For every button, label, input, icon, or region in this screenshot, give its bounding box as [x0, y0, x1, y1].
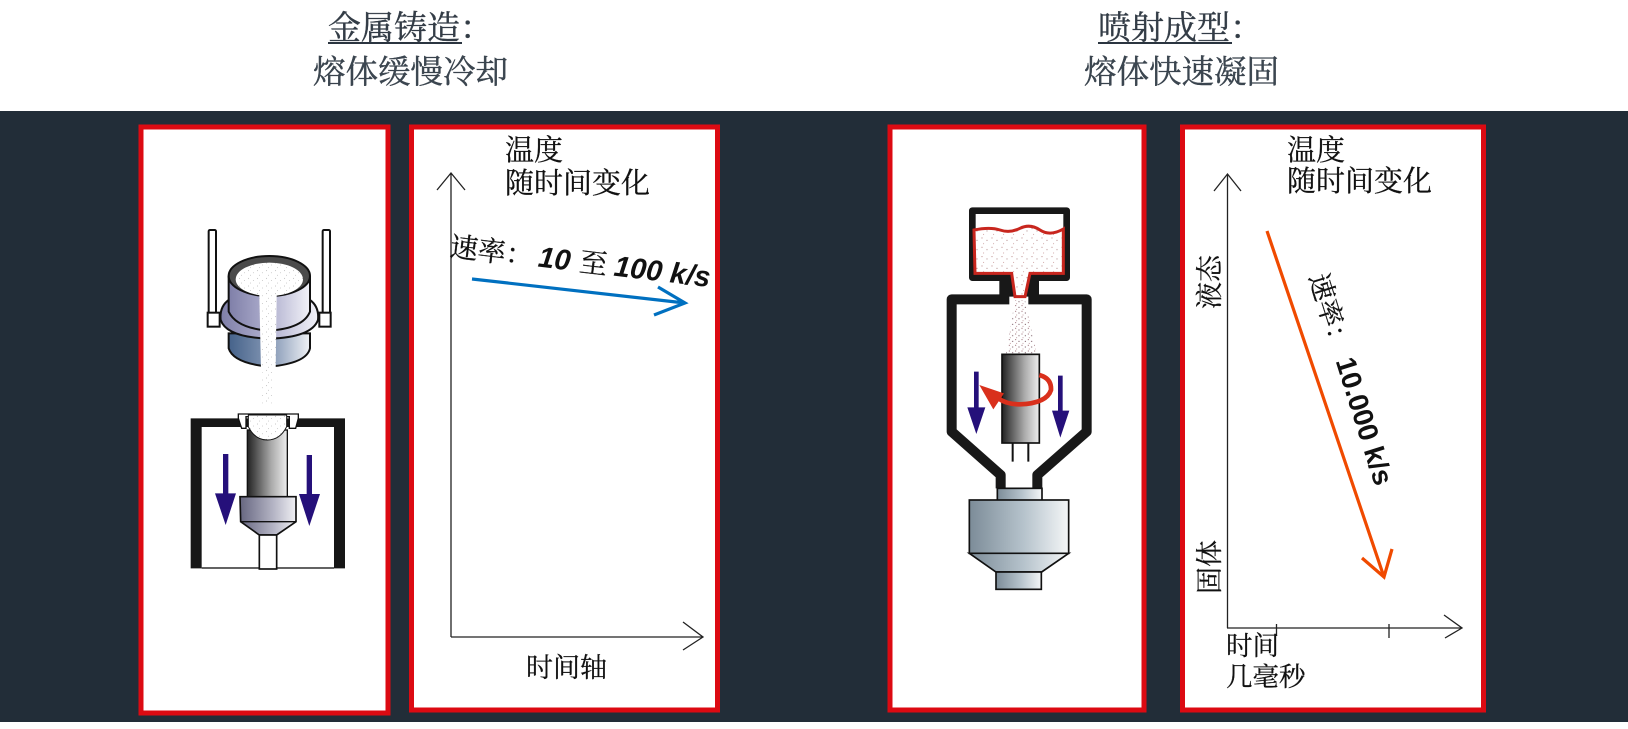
panel: spray forming chart — [1182, 127, 1484, 710]
axes — [1214, 174, 1462, 638]
chart title: 随时间变化 — [505, 167, 650, 200]
icon: melt crucible — [972, 211, 1067, 297]
axes — [437, 173, 703, 650]
icon: casting mould — [191, 414, 345, 569]
heading: metal casting: 熔体缓慢冷却 — [313, 54, 508, 91]
heading: spray forming: 喷射成型： — [1098, 10, 1263, 47]
icon: spray chamber — [952, 299, 1087, 488]
chart title: 温度 — [1287, 134, 1345, 167]
heading: metal casting: 金属铸造： — [328, 10, 493, 47]
blue rate arrow — [472, 279, 685, 315]
heading: spray forming: 熔体快速凝固 — [1084, 54, 1279, 91]
label: solid: 固体 — [1195, 540, 1225, 594]
label: liquid: 液态 — [1195, 254, 1225, 309]
time axis label: 时间轴 — [526, 653, 607, 683]
chart title: 温度 — [505, 134, 563, 167]
rate label: 速率：10至100 k/s — [448, 231, 712, 294]
rate label: 速率：10.000 k/s — [1303, 269, 1399, 489]
icon: downward arrows — [215, 454, 320, 526]
icon: atomiser base — [969, 488, 1069, 589]
heading: metal casting — [313, 10, 508, 91]
panel: casting illustration — [141, 127, 388, 713]
red rate arrow — [1267, 231, 1392, 577]
panel: spray forming illustration — [890, 127, 1144, 710]
chart title: 随时间变化 — [1287, 165, 1432, 198]
time label: 几毫秒 — [1226, 662, 1307, 692]
icon: rotating arrow — [979, 375, 1051, 409]
icon: ladle — [208, 230, 331, 403]
time label: 时间 — [1226, 631, 1279, 661]
heading: spray forming — [1084, 10, 1279, 91]
panel: casting chart — [412, 127, 718, 710]
icon: blue arrows — [967, 372, 1069, 438]
